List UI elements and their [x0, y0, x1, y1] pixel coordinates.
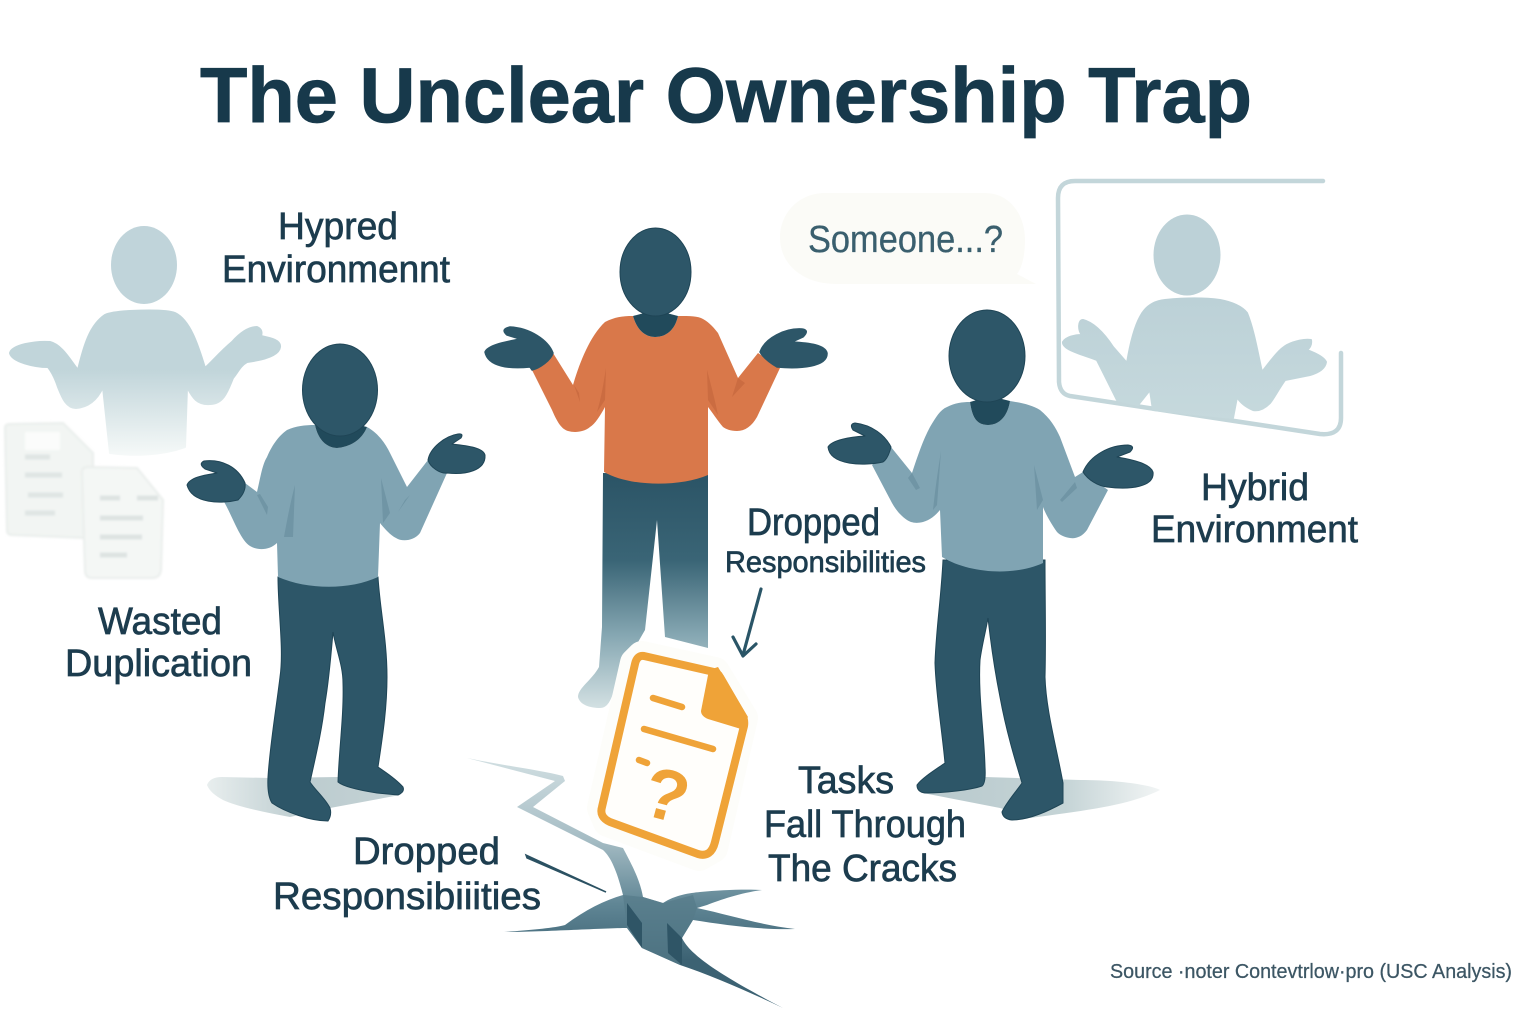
label: Tasks Fall Through The Cracks [764, 760, 966, 890]
question mark: ? [635, 751, 698, 840]
frame [1058, 181, 1341, 434]
crack lower body [623, 895, 697, 965]
trousers [917, 560, 1063, 820]
label: Hybrid Environment [1151, 467, 1358, 551]
folded corner [701, 667, 748, 729]
icon: orange document with question mark [601, 656, 748, 856]
label: Hypred Environmennt: Hypred [278, 206, 398, 248]
label: Hypred Environmennt: Environmennt [222, 249, 450, 291]
speech bubble [780, 193, 1036, 284]
label: Hybrid Environment: Environment [1151, 509, 1358, 551]
ghost body [1063, 298, 1326, 418]
head [302, 344, 378, 436]
neck [315, 420, 367, 448]
left hand [187, 461, 245, 502]
label: Wasted Duplication [65, 601, 252, 685]
sweater [532, 316, 780, 484]
sweater fold shading [574, 368, 745, 415]
ghost head [1154, 214, 1220, 296]
label: Tasks Fall Through The Cracks: Tasks [798, 760, 894, 802]
arrow to dropped document [733, 589, 761, 656]
bubble text: Someone...? [808, 219, 1003, 261]
label: Dropped Responsibiiities lower: Responsibiiities [273, 876, 541, 918]
neck [633, 310, 678, 337]
document body [601, 656, 744, 855]
person: left figure [187, 344, 485, 821]
right hand [760, 329, 827, 368]
person: right figure [828, 310, 1160, 820]
ground crack [467, 758, 795, 1008]
title: The Unclear Ownership Trap [200, 51, 1252, 139]
right hand [428, 434, 485, 473]
label: Dropped Responsibiiities lower [273, 831, 541, 918]
neck [970, 396, 1010, 425]
label: Tasks Fall Through The Cracks: The Cracks [768, 848, 957, 890]
document lines [639, 698, 713, 763]
label: Dropped Responsibilities centre [725, 502, 926, 579]
left hand [828, 423, 891, 464]
sweater [872, 401, 1108, 571]
label: Hypred Environmennt [222, 206, 450, 291]
head [949, 310, 1025, 402]
crack fissure [467, 758, 795, 1008]
document front [82, 467, 163, 578]
right hand [1083, 445, 1153, 488]
crack pointer line [526, 855, 606, 892]
video call frame with ghost figure [1058, 181, 1341, 434]
sweater fold shading [257, 478, 410, 537]
trousers fading downward [578, 473, 708, 708]
source note: Source ·noter Contevtrlow·pro (USC Analysis) [1110, 961, 1512, 983]
label: Hybrid Environment: Hybrid [1201, 467, 1309, 509]
head [620, 228, 691, 316]
sweater [223, 425, 447, 587]
icon: duplicate documents [5, 423, 163, 578]
label: Dropped Responsibilities centre: Responsibilities [725, 546, 926, 579]
ghost figure: left remote worker [10, 226, 280, 455]
trousers [268, 577, 403, 821]
person: centre figure in orange [485, 228, 827, 708]
left hand [485, 327, 553, 370]
label: Wasted Duplication: Duplication [65, 643, 252, 685]
floor shadow [923, 777, 1160, 818]
label: Tasks Fall Through The Cracks: Fall Through [764, 804, 966, 846]
label: Dropped Responsibiiities lower: Dropped [353, 831, 500, 873]
floor shadow [207, 777, 403, 817]
document halo [602, 656, 743, 856]
document back [5, 423, 93, 538]
label: Dropped Responsibilities centre: Dropped [747, 502, 880, 544]
label: Wasted Duplication: Wasted [98, 601, 222, 643]
crack depth [627, 903, 682, 965]
sweater fold shading [908, 451, 1077, 510]
